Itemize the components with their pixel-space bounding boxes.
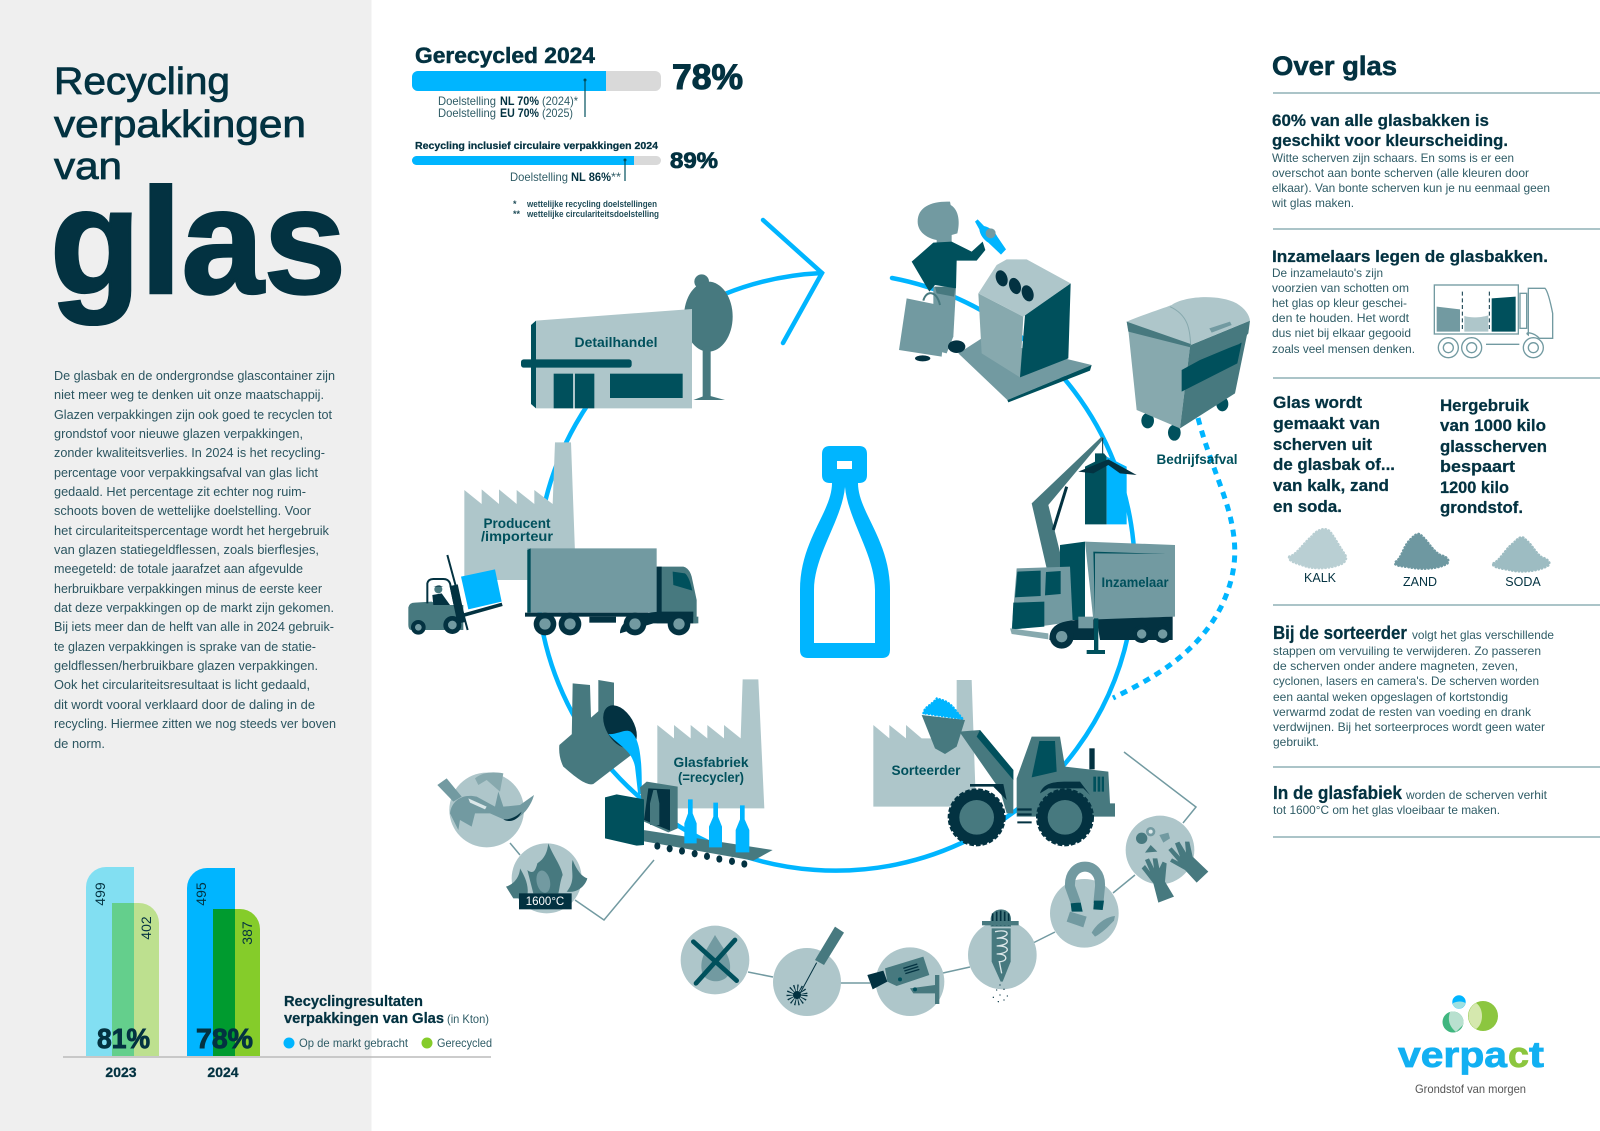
text: Hergebruik: Hergebruik	[1440, 396, 1530, 415]
chart legend	[284, 993, 492, 1050]
icon: flames 1600°C	[506, 843, 587, 913]
text: Hergebruik: grondstof.	[1440, 498, 1523, 517]
icon: business waste container	[1127, 297, 1250, 441]
intro text block: grondstof voor nieuwe glazen verpakkingen,	[54, 426, 303, 441]
station: Glasfabriek with ladle and conveyor: (=recycler)	[678, 769, 744, 785]
text: In de glasfabiek	[1273, 783, 1548, 817]
progress: Recycling inclusief circulaire verpakkingen: **	[611, 170, 621, 184]
footnotes	[513, 199, 659, 219]
label: Bedrijfsafval: Bedrijfsafval	[1156, 451, 1238, 467]
bar chart: recycling results 2023 and 2024: 387	[239, 921, 255, 945]
intro text block: percentage voor verpakkingsafval van glas licht	[54, 465, 318, 480]
text: Inzamelaars legen de glasbakken: den te houden. Het wordt	[1272, 311, 1410, 325]
icon: laser	[773, 927, 844, 1016]
progress: Gerecycled 2024: Gerecycled 2024	[415, 43, 596, 68]
text: Bij de sorteerder: gebruikt.	[1273, 735, 1319, 749]
text: 60% van alle glasbakken	[1271, 111, 1550, 210]
text: 60% van alle glasbakken: overschot aan bonte scherven (alle kleuren door	[1272, 166, 1529, 180]
footnotes: wettelijke circulariteitsdoelstelling	[526, 209, 659, 219]
icon: pile kalk: KALK	[1304, 571, 1337, 585]
icon: pile zand: ZAND	[1403, 575, 1437, 589]
text: 60% van alle glasbakken: elkaar). Van bonte scherven kun je nu eenmaal geen	[1272, 181, 1550, 195]
footnotes: wettelijke recycling doelstellingen	[526, 199, 657, 209]
intro text block: De glasbak en de ondergrondse glascontainer zijn	[54, 368, 335, 383]
intro text block: de norm.	[54, 736, 105, 751]
station: Detailhandel: Detailhandel	[574, 334, 658, 350]
text: Bij de sorteerder: een aantal weken opgeslagen of kortstondig	[1273, 690, 1508, 704]
footnotes: **	[513, 209, 521, 219]
title: van	[54, 146, 122, 188]
intro text block: schoots boven de wettelijke doelstelling. Voor	[54, 503, 312, 518]
logo: verpact	[1398, 995, 1544, 1096]
progress: Gerecycled 2024: Doelstelling	[438, 106, 496, 120]
text: 60% van alle glasbakken: Witte scherven zijn schaars. En soms is er een	[1272, 151, 1514, 165]
intro text block: dat deze verpakkingen op de markt zijn gekomen.	[54, 600, 334, 615]
logo: verpact: t	[1529, 1034, 1544, 1075]
text: Glas wordt gemaakt	[1273, 393, 1395, 516]
intro text block: meegeteld: de totale jaarafzet aan afgevulde	[54, 561, 303, 576]
station: Producent / importeur: /importeur	[481, 528, 554, 544]
progress: Gerecycled 2024	[412, 43, 743, 120]
station: Detailhandel	[521, 274, 733, 408]
title	[50, 61, 346, 325]
progress: Gerecycled 2024: 78%	[672, 58, 743, 97]
progress: Recycling inclusief circulaire verpakkingen: Recycling inclusief circulaire verpakkingen 2024	[415, 140, 658, 152]
icon: central glass bottle	[800, 446, 890, 658]
text: 60% van alle glasbakken: geschikt voor kleurscheiding.	[1272, 131, 1508, 150]
chart legend: Op de markt gebracht	[299, 1036, 409, 1050]
station: Glasfabriek with ladle and conveyor	[559, 679, 773, 868]
chart legend: Recyclingresultaten	[284, 993, 423, 1010]
intro text block: dit wordt vooral verklaard door de daling in de	[54, 697, 315, 712]
title: Recycling	[54, 61, 230, 103]
text: In de glasfabiek: worden de scherven verhit	[1405, 788, 1548, 802]
text: Glas wordt gemaakt: en soda.	[1273, 497, 1342, 516]
intro text block: niet meer weg te denken uit onze maatschappij.	[54, 387, 324, 402]
text: Inzamelaars legen de glasbakken	[1272, 247, 1548, 356]
progress: Gerecycled 2024: EU 70%	[500, 106, 539, 120]
chart legend: Gerecycled	[437, 1036, 492, 1050]
icon: pile kalk	[1289, 529, 1346, 585]
intro text block: Ook het circulariteitsresultaat is licht gedaald,	[54, 677, 310, 692]
logo: verpact: verpa	[1398, 1034, 1508, 1075]
intro text block: van glazen statiegeldflessen, zoals bierflesjes,	[54, 542, 319, 557]
text: Inzamelaars legen de glasbakken: het glas op kleur geschei-	[1272, 296, 1407, 310]
icon: flames 1600°C: 1600°C	[526, 896, 564, 908]
progress: Gerecycled 2024: (2025)	[542, 106, 573, 120]
station: Glasfabriek with ladle and conveyor: Glasfabriek	[674, 754, 749, 770]
progress: Gerecycled 2024: NL 70%	[500, 94, 539, 108]
icon: pile zand	[1395, 534, 1448, 589]
text: 60% van alle glasbakken: 60% van alle glasbakken is	[1272, 111, 1489, 130]
bar chart: recycling results 2023 and 2024: 495	[193, 882, 209, 906]
text: Glas wordt gemaakt: Glas wordt	[1273, 393, 1362, 412]
bar chart: recycling results 2023 and 2024: 78%	[196, 1023, 253, 1054]
intro text block: herbruikbare verpakkingen minus de eerste keer	[54, 581, 323, 596]
text: Bij de sorteerder: stappen om vervuiling te verwijderen. Zo passeren	[1273, 644, 1541, 658]
heading: Over glas: Over glas	[1272, 51, 1397, 81]
panel: left sidebar	[0, 0, 372, 1131]
station: Inzamelaar truck with crane: Inzamelaar	[1102, 574, 1169, 590]
text: Bij de sorteerder: Bij de sorteerder	[1273, 623, 1407, 643]
text: In de glasfabiek: tot 1600°C om het glas vloeibaar te maken.	[1273, 803, 1500, 817]
progress: Recycling inclusief circulaire verpakkingen: NL 86%	[571, 170, 611, 184]
logo: verpact: c	[1508, 1034, 1529, 1075]
text: Hergebruik: bespaart	[1440, 457, 1515, 476]
intro text block: recycling. Hiermee zitten we nog steeds ver boven	[54, 716, 336, 731]
intro text block: te glazen verpakkingen is sprake van de statie-	[54, 639, 316, 654]
text: In de glasfabiek: In de glasfabiek	[1273, 783, 1403, 803]
text: Bij de sorteerder: verwarmd zodat de resten van voeding en drank	[1273, 705, 1532, 719]
icon: magnet	[1050, 867, 1119, 948]
bar chart: recycling results 2023 and 2024: 2023	[105, 1064, 137, 1080]
dashed line: bedrijfsafval route	[1113, 418, 1235, 698]
text: Inzamelaars legen de glasbakken: zoals veel mensen denken.	[1272, 342, 1415, 356]
progress: Recycling inclusief circulaire verpakkingen: Doelstelling	[510, 170, 568, 184]
text: Bij de sorteerder: cyclonen, lasers en camera's. De scherven worden	[1273, 674, 1539, 688]
progress: Recycling inclusief circulaire verpakkingen	[412, 140, 718, 184]
connector lines between process steps	[510, 752, 1196, 983]
text: Glas wordt gemaakt: de glasbak of...	[1273, 455, 1395, 474]
bar chart: recycling results 2023 and 2024: 499	[92, 882, 108, 906]
icon: forklift with blue crate	[408, 555, 503, 635]
logo: verpact: Grondstof van morgen	[1415, 1082, 1526, 1096]
bar chart: recycling results 2023 and 2024	[63, 867, 491, 1080]
progress: Gerecycled 2024: (2024)*	[542, 94, 578, 108]
bar chart: recycling results 2023 and 2024: 402	[138, 916, 154, 940]
progress: Gerecycled 2024: Doelstelling	[438, 94, 496, 108]
title: verpakkingen	[54, 104, 306, 146]
text: Inzamelaars legen de glasbakken: Inzamelaars legen de glasbakken.	[1272, 247, 1548, 266]
intro text block: Glazen verpakkingen zijn ook goed te recyclen tot	[54, 407, 332, 422]
icon: no water	[681, 926, 749, 994]
icon: compartment truck	[1434, 285, 1553, 358]
text: Glas wordt gemaakt: gemaakt van	[1273, 414, 1380, 433]
bar chart: recycling results 2023 and 2024: 81%	[97, 1023, 150, 1054]
footnotes: *	[513, 199, 517, 209]
station: Sorteerder with loader: Sorteerder	[892, 762, 961, 778]
text: Bij de sorteerder: verdwijnen. Bij het sorteerproces wordt geen water	[1273, 720, 1545, 734]
station: Producent / importeur: Producent	[484, 515, 551, 531]
station: Producent / importeur	[464, 442, 698, 635]
icon: hand sorting	[1126, 816, 1208, 903]
text: Inzamelaars legen de glasbakken: dus niet bij elkaar gegooid	[1272, 326, 1411, 340]
intro text block: gedaald. Het percentage zit echter nog ruim-	[54, 484, 306, 499]
icon: pile soda: SODA	[1505, 575, 1541, 589]
intro text block	[54, 368, 336, 751]
chart legend: verpakkingen van Glas	[284, 1010, 444, 1027]
text: Bij de sorteerder	[1273, 623, 1554, 749]
station: Sorteerder with loader	[873, 680, 1115, 845]
title: glas	[50, 157, 346, 325]
text: Inzamelaars legen de glasbakken: De inzamelauto's zijn	[1272, 266, 1383, 280]
intro text block: het circulariteitspercentage wordt het hergebruik	[54, 523, 329, 538]
icon: camera	[867, 947, 944, 1016]
intro text block: geldflessen/herbruikbare glazen verpakkingen.	[54, 658, 318, 673]
text: Bij de sorteerder: volgt het glas verschillende	[1412, 628, 1554, 642]
text: Hergebruik: van 1000 kilo	[1440, 416, 1546, 435]
icon: broken glass	[437, 772, 534, 847]
station: Inzamelaar truck with crane	[1010, 437, 1175, 654]
progress: Recycling inclusief circulaire verpakkingen: 89%	[670, 148, 718, 173]
icon: pile soda	[1493, 537, 1549, 589]
icon: cyclone	[968, 909, 1037, 1002]
icon: person at bottle bank	[899, 202, 1092, 402]
bar chart: recycling results 2023 and 2024: 2024	[207, 1064, 239, 1080]
text: 60% van alle glasbakken: wit glas maken.	[1271, 196, 1354, 210]
intro text block: Bij iets meer dan de helft van alle in 2024 gebruik-	[54, 619, 334, 634]
text: Inzamelaars legen de glasbakken: voorzien van schotten om	[1272, 281, 1409, 295]
text: Hergebruik: 1200 kilo	[1440, 478, 1509, 497]
text: Hergebruik: glasscherven	[1440, 437, 1547, 456]
chart legend: (in Kton)	[447, 1012, 489, 1026]
text: Glas wordt gemaakt: scherven uit	[1273, 435, 1372, 454]
text: Bij de sorteerder: de scherven onder andere magneten, zeven,	[1273, 659, 1518, 673]
cycle arrow ring	[537, 220, 1135, 871]
text: Glas wordt gemaakt: van kalk, zand	[1273, 476, 1389, 495]
text: Hergebruik	[1440, 396, 1547, 517]
intro text block: zonder kwaliteitsverlies. In 2024 is het recycling-	[54, 445, 325, 460]
